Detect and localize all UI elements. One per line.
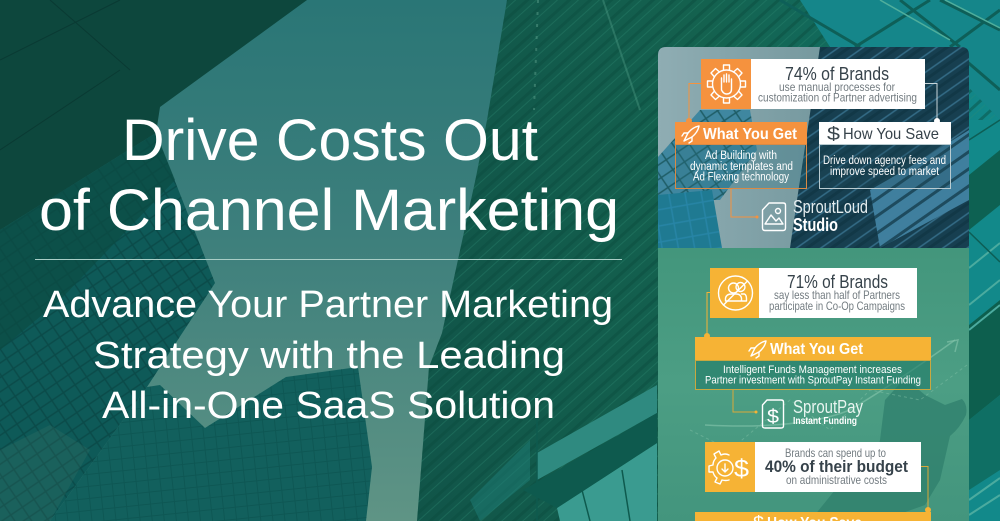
- stat card: 74% of Brands: 74% of Brands: [785, 64, 889, 84]
- label: SproutLoud Studio: SproutLoud: [793, 197, 868, 217]
- stat card: 71% of Brands: say less than half of Partners: [774, 288, 900, 302]
- stat card: 40% of their budget: [705, 442, 921, 492]
- label: SproutPay Instant Funding: Instant Funding: [793, 416, 857, 427]
- title: [39, 108, 619, 243]
- card: What You Get (yellow): What You Get: [770, 341, 864, 358]
- stat card: 71% of Brands: 71% of Brands: [787, 272, 888, 292]
- connector: What You Get to SproutPay: [733, 390, 756, 412]
- panel: SproutPay: [658, 248, 969, 521]
- stat card: 74% of Brands: [701, 59, 925, 109]
- card: What You Get (orange): What You Get: [703, 126, 798, 143]
- subtitle: All-in-One SaaS Solution: [102, 385, 555, 427]
- card: What You Get (orange): Ad Building with: [705, 150, 777, 162]
- icon: gear with hand: [708, 65, 746, 103]
- left glass building: [0, 133, 215, 521]
- connector: stat to How You Save: [925, 84, 937, 122]
- icon: rocket: [682, 126, 699, 143]
- card: How You Save (white): $: [827, 124, 840, 144]
- icon: rocket: [749, 341, 766, 358]
- card: How You Save (white): improve speed to market: [830, 166, 940, 178]
- card: How You Save (white): [819, 122, 951, 188]
- stat card: 74% of Brands: use manual processes for: [779, 80, 895, 94]
- chart backdrop: [690, 340, 967, 521]
- card: How You Save (white): How You Save: [843, 126, 939, 143]
- subtitle: Advance Your Partner Marketing: [43, 284, 613, 326]
- card: What You Get (orange): dynamic templates and: [690, 161, 793, 173]
- card: How You Save (white): Drive down agency fees and: [823, 155, 946, 167]
- stat card: 40% of their budget: $: [734, 455, 749, 483]
- card: What You Get (yellow): Intelligent Funds Management increases: [723, 364, 902, 376]
- icon: studio document: [762, 203, 786, 230]
- lower middle windows: [537, 385, 657, 480]
- stat card: 71% of Brands: participate in Co-Op Campaigns: [769, 299, 905, 313]
- card: How You Save (clipped): [695, 512, 931, 521]
- label: SproutLoud Studio: [793, 197, 868, 235]
- subtitle: [43, 284, 613, 427]
- icon: crossed-out people: [718, 276, 752, 310]
- label: SproutPay Instant Funding: [793, 397, 863, 427]
- icon: gear with dollar: [709, 451, 733, 484]
- stat card: 74% of Brands: customization of Partner advertising: [758, 90, 917, 104]
- stat card: 71% of Brands: [710, 268, 917, 318]
- label: SproutLoud Studio: Studio: [793, 215, 838, 235]
- connector: budget to How You Save: [921, 466, 928, 510]
- card: What You Get (orange): Ad Flexing technology: [693, 172, 789, 184]
- connector: stat to What You Get: [689, 84, 757, 217]
- card: What You Get (yellow): [695, 337, 931, 390]
- lower middle building: [50, 367, 372, 521]
- stat card: 40% of their budget: on administrative costs: [786, 473, 887, 487]
- stat card: 40% of their budget: 40% of their budget: [765, 457, 908, 476]
- title: Drive Costs Out: [122, 108, 538, 173]
- icon: SproutPay document: [762, 400, 784, 428]
- card: What You Get (orange): [675, 122, 807, 188]
- card: What You Get (yellow): Partner investment with SproutPay Instant Funding: [705, 374, 921, 386]
- subtitle: Strategy with the Leading: [93, 335, 565, 377]
- connector: stat to What You Get: [707, 292, 710, 337]
- right strip windows: [969, 120, 1000, 521]
- label: SproutPay Instant Funding: SproutPay: [793, 397, 863, 417]
- icon: SproutPay document: $: [767, 407, 779, 428]
- panel: SproutLoud Studio: [658, 47, 969, 248]
- title: of Channel Marketing: [39, 178, 619, 243]
- upper left dark building: [0, 0, 307, 230]
- stat card: 40% of their budget: Brands can spend up to: [785, 446, 886, 460]
